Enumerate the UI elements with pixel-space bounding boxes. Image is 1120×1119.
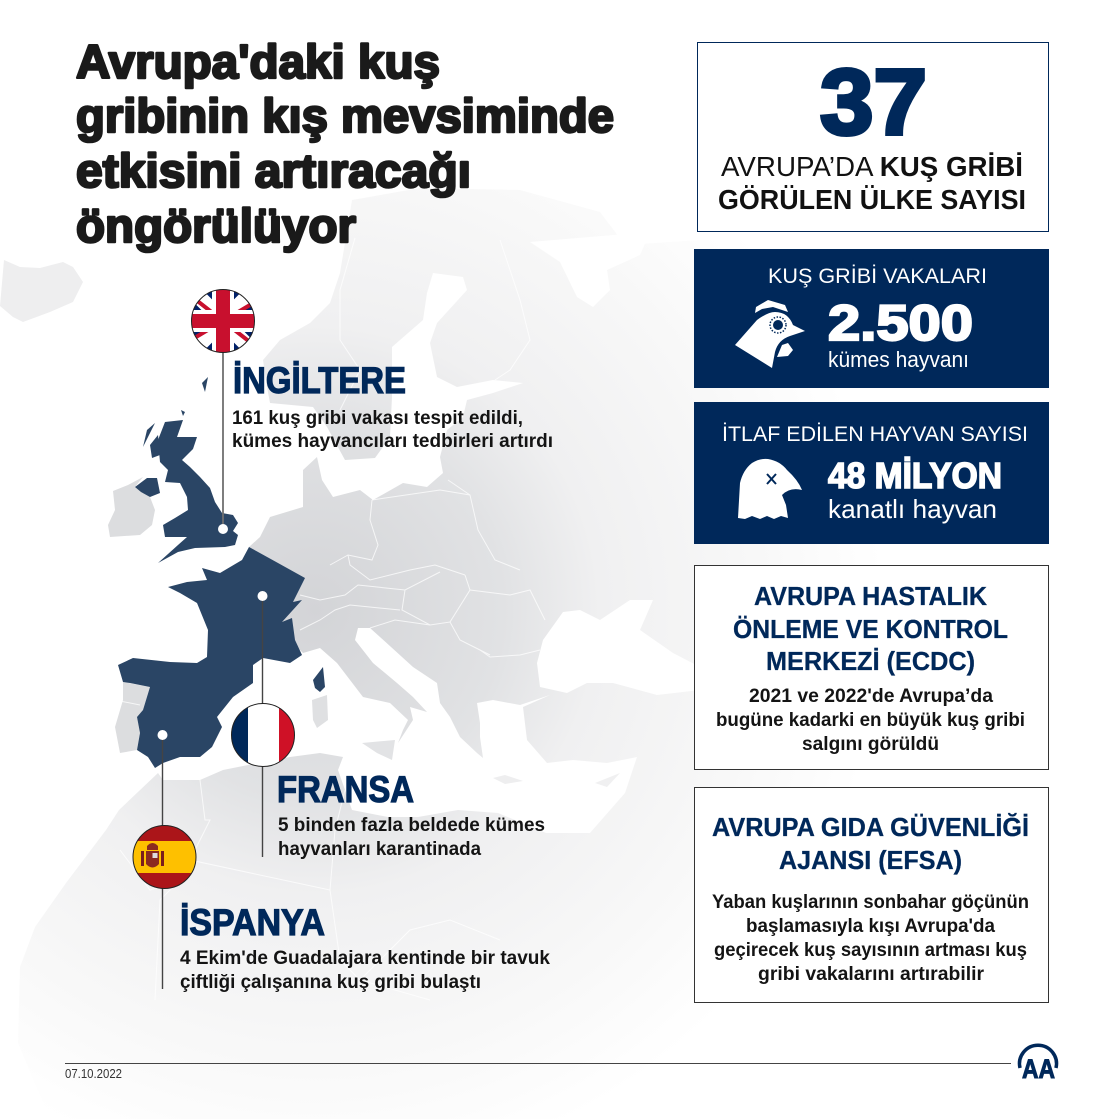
text block: France: FRANSA <box>277 769 414 810</box>
title: öngörülüyor <box>76 199 356 252</box>
value: 48 million: 48 MİLYON <box>828 455 1002 496</box>
panel: 37 countries <box>698 42 1048 232</box>
panel: culled animals <box>694 402 1049 544</box>
text block: United Kingdom <box>232 360 553 452</box>
body: EFSA <box>712 892 1029 985</box>
heading: cases: KUŞ GRİBİ VAKALARI <box>768 265 987 288</box>
title: etkisini artıracağı <box>76 144 471 197</box>
flag: United Kingdom <box>190 288 256 354</box>
text block: United Kingdom: İNGİLTERE <box>233 360 406 401</box>
pin line: United Kingdom <box>218 352 228 534</box>
heading: EFSA: AJANSI (EFSA) <box>779 845 962 875</box>
caption: countries with bird flu: AVRUPA’DA KUŞ GRİBİ <box>721 151 1023 182</box>
value: 2.500: 2.500 <box>828 295 973 351</box>
flag: Spain <box>132 825 198 889</box>
body: ECDC: bugüne kadarki en büyük kuş gribi <box>716 710 1025 731</box>
icon: infected chicken head <box>735 300 805 368</box>
panel: EFSA <box>694 788 1048 1002</box>
body: EFSA: başlamasıyla kışı Avrupa'da <box>746 916 995 937</box>
text block: France: 5 binden fazla beldede kümes <box>278 815 545 836</box>
panel: ECDC <box>694 566 1048 770</box>
flag: France <box>231 703 295 767</box>
icon: dead bird head <box>738 459 802 519</box>
text block: Spain: İSPANYA <box>180 902 325 943</box>
highlighted countries on the map <box>118 377 325 768</box>
text block: United Kingdom: kümes hayvancıları tedbirleri artırdı <box>232 431 553 452</box>
heading: ECDC: MERKEZİ (ECDC) <box>766 646 975 676</box>
caption: poultry: kümes hayvanı <box>828 347 969 372</box>
panel: bird flu cases <box>694 249 1049 388</box>
text block: United Kingdom: 161 kuş gribi vakası tespit edildi, <box>232 408 523 429</box>
heading: ECDC: AVRUPA HASTALIK <box>754 581 987 611</box>
logo: AA: AA <box>1022 1054 1055 1084</box>
body: ECDC: 2021 ve 2022'de Avrupa’da <box>749 686 993 707</box>
heading: ECDC <box>733 581 1008 676</box>
heading: culled: İTLAF EDİLEN HAYVAN SAYISI <box>722 423 1028 446</box>
text block: Spain: çiftliği çalışanına kuş gribi bulaştı <box>180 972 481 993</box>
text block: France <box>277 769 545 860</box>
caption: countries with bird flu: GÖRÜLEN ÜLKE SAYISI <box>718 184 1026 215</box>
pin line: France <box>258 591 268 857</box>
caption: poultry birds: kanatlı hayvan <box>828 494 997 524</box>
heading: EFSA: AVRUPA GIDA GÜVENLİĞİ <box>712 812 1029 842</box>
text block: Spain <box>180 902 550 993</box>
heading: ECDC: ÖNLEME VE KONTROL <box>733 614 1008 644</box>
pin line: Spain <box>158 730 168 989</box>
body: ECDC <box>716 686 1025 755</box>
title <box>76 35 614 252</box>
body: ECDC: salgını görüldü <box>802 734 939 755</box>
heading: EFSA <box>712 812 1029 875</box>
title: gribinin kış mevsiminde <box>76 89 614 142</box>
text block: France: hayvanları karantinada <box>278 839 481 860</box>
text block: Spain: 4 Ekim'de Guadalajara kentinde bir tavuk <box>180 948 550 969</box>
footer rule <box>65 1062 1011 1064</box>
title: Avrupa'daki kuş <box>76 35 440 88</box>
logo: AA <box>1020 1045 1056 1084</box>
big number 37: 37 <box>820 50 927 154</box>
caption: countries with bird flu <box>718 151 1026 215</box>
body: EFSA: Yaban kuşlarının sonbahar göçünün <box>712 892 1029 913</box>
date: 07.10.2022 <box>65 1066 122 1081</box>
body: EFSA: gribi vakalarını artırabilir <box>758 964 985 985</box>
body: EFSA: geçirecek kuş sayısının artması kuş <box>714 940 1027 961</box>
